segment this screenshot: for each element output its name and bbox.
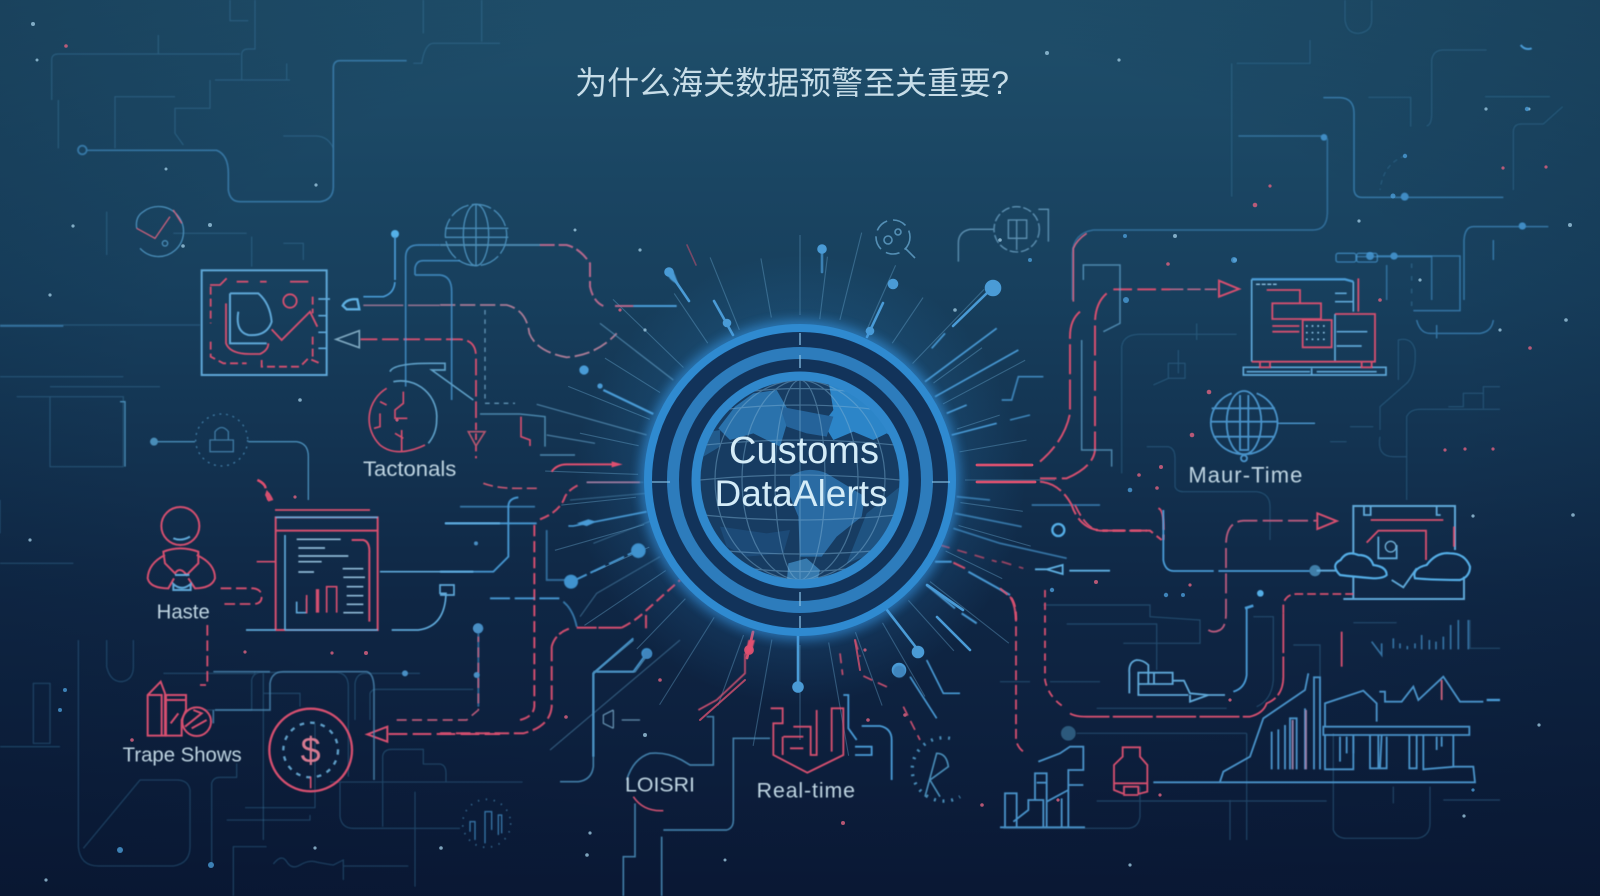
spoke: left upper [579,365,653,414]
icon: skyline chart [1000,747,1085,827]
trace: dashed arc [440,305,617,357]
trace: pink dash vertical [397,637,478,720]
title: 为什么海关数据预警至关重要? [575,65,1009,101]
trace: faint dashes [485,310,515,403]
icon: laptop dashboard [1243,278,1386,375]
center label: Customs [729,430,879,472]
icon: small bracket [603,710,640,728]
trace: pink dashed routes [440,485,680,733]
trace: pink link [633,653,745,811]
trace: blue routes [440,497,647,757]
icon: globe [1210,391,1315,461]
trace: pink ray [587,480,640,485]
background circuit traces: lower left [0,640,523,896]
trace: pink dashes [1075,505,1147,531]
arrow: pink to globe [552,461,623,472]
icon: clock gauge [136,207,184,257]
icon: dollar coin [269,709,352,791]
connector: capsule [1035,565,1110,574]
mid-left traces below [440,482,680,757]
background circuit traces: left side [0,325,200,563]
outer ring [648,328,952,632]
label: Maur-Time: Maur-Time [1188,463,1302,488]
right lower cluster [1000,505,1500,827]
icon: person [148,507,215,590]
spokes with spindle ends and nodes [666,246,1000,692]
arrow: to laptop [1170,281,1239,297]
trace: blue step [480,414,575,483]
trace: lower right spindles [927,562,1010,623]
icon: cargo tag [1129,660,1225,702]
trace: lock connector [120,402,308,500]
trace: vertical blue [1233,606,1253,692]
icon: cargo pod [1114,747,1147,795]
pink spark [257,480,268,500]
label: Real-time: Real-time [757,779,855,803]
background circuit traces: upper right [1072,0,1563,300]
icon: report document [246,510,500,630]
left lower cluster [123,480,500,791]
trace: muted link [363,303,440,308]
mid-left traces above [440,245,680,488]
small upper icon [876,220,915,258]
pink spark top [258,480,273,502]
trace: right spoke [910,660,960,718]
trace: blue node column [402,541,482,678]
arrow: into chart board [336,331,485,458]
trace: pink fragments [840,640,920,740]
icon: compass dial [912,738,960,801]
trace: pale rays [550,482,680,750]
trace: pink step [521,417,530,446]
label: Haste: Haste [157,601,210,623]
icon: connector head [343,299,359,309]
center label: Data Alerts [715,473,887,514]
icon: padlock [196,414,248,466]
outer and inner ring glow [647,327,953,633]
trace: pale box [1082,265,1120,467]
label: LOISRI: LOISRI [625,774,695,797]
icon: tactonals circle [369,363,473,452]
arrow: to calendar [1208,513,1337,632]
background circuit traces: right side [1122,240,1500,540]
central globe emblem [648,328,952,632]
trace: blue node [363,230,399,297]
icon: factory trend [1153,673,1500,782]
label: Tactonals: Tactonals [363,457,456,481]
rays [537,323,673,443]
ring fill [648,328,952,632]
globe body [700,380,907,583]
spokes [925,328,1100,558]
icon: calendar with clouds [1317,506,1470,599]
background circuit traces: lower right [1000,605,1500,840]
trace: blue bus [1163,510,1310,571]
pink ray segments [687,245,1035,720]
trace: lower dash [483,483,540,488]
icon: real-time shield [771,695,892,780]
bottom centre cluster [560,640,960,896]
middle ring [673,353,927,607]
label: Trape Shows: Trape Shows [123,745,242,767]
trace: blue links [213,672,374,780]
mid-right ray fragments [925,207,1100,623]
trace: lower right pink fragments [940,545,1023,620]
icon: dollar coin: $ [301,730,321,771]
trace: blue upper bus [560,640,770,896]
background circuit traces: upper left [52,0,500,267]
spokes and nodes [473,512,652,659]
center label [715,430,887,514]
inner ring [696,376,904,584]
connector: dashed [200,588,262,685]
radial rays around globe [545,233,1055,756]
trace: top route to globe [440,245,677,306]
trace: blue pipes [406,245,460,400]
central glow [575,255,1025,705]
icon: document chart board [202,270,330,375]
spoke: spindle top [667,268,680,288]
icon: hazard dial [958,207,1048,262]
trace: pink routes [1040,233,1170,540]
left upper cluster [120,204,508,500]
ring ticks [652,333,950,628]
icon: globe wireframe [445,204,508,266]
connector: ring node [1052,524,1064,536]
right upper cluster [1040,233,1386,540]
icon: trade shows buildings [148,682,211,736]
trace: pink bus [1000,588,1353,753]
arrow: to dollar coin [367,727,500,742]
